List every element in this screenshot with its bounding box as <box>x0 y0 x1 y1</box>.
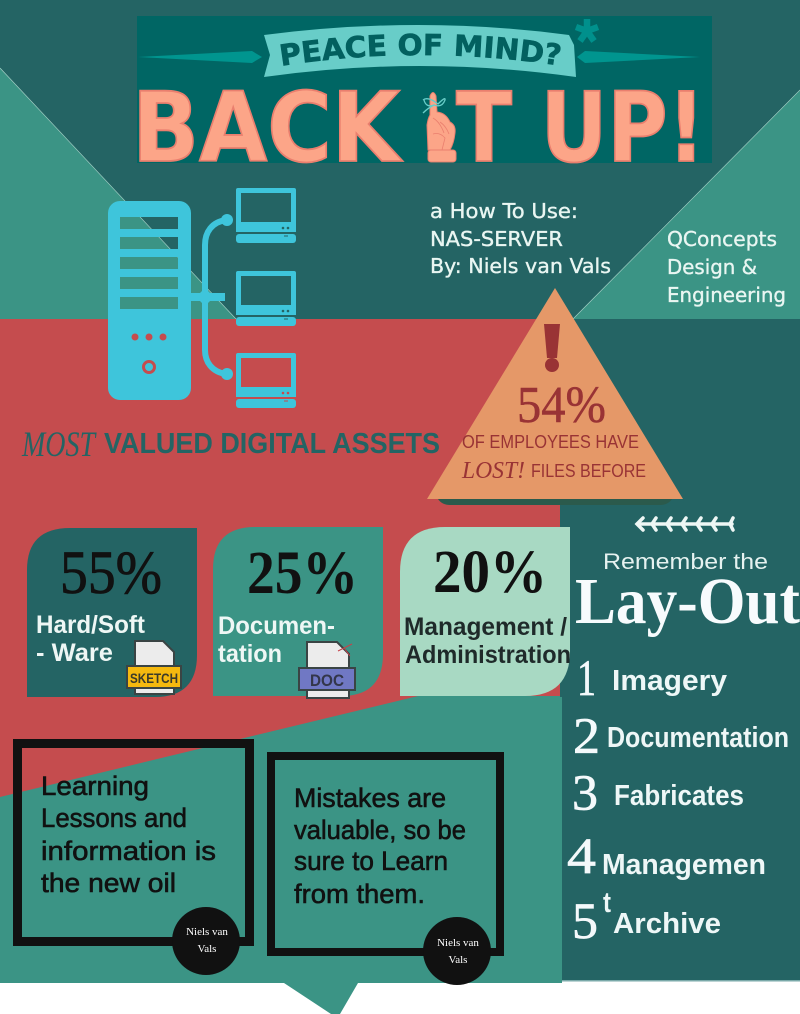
icon: doc file: DOC <box>310 671 344 690</box>
network connectors <box>191 214 233 380</box>
author badge: Niels van <box>186 926 228 938</box>
background: right teal triangle <box>573 90 800 319</box>
stat: 25% <box>247 540 358 607</box>
list item 4: t <box>603 887 611 919</box>
subtitle text block <box>430 199 611 278</box>
icon: left pointer <box>138 51 262 63</box>
company text block: Design & <box>667 255 757 279</box>
list item 2 <box>573 709 789 765</box>
quote text: valuable, so be <box>294 815 466 845</box>
list item 1: 1 <box>577 651 596 707</box>
icon: asterisk <box>576 19 598 41</box>
list item 2: 2 <box>573 709 600 765</box>
quote box 2 <box>271 756 500 985</box>
label: Management / <box>404 613 567 641</box>
quote text: Mistakes are <box>294 783 446 813</box>
monitor middle <box>236 271 296 326</box>
author badge: Vals <box>198 943 216 955</box>
caption line 1: OF EMPLOYEES HAVE <box>462 432 639 452</box>
quote text <box>294 783 466 909</box>
quote text: from them. <box>294 879 425 909</box>
list item 5: Archive <box>613 908 721 940</box>
script word: MOST <box>21 424 97 464</box>
card: management <box>400 527 571 696</box>
company text block <box>667 227 786 307</box>
list item 1 <box>577 651 727 707</box>
list item 3: 3 <box>572 766 598 822</box>
server lights <box>132 334 166 340</box>
card: hardware and software: - Ware <box>36 639 113 667</box>
heading: most valued digital assets <box>21 424 440 464</box>
label: Hard/Soft <box>36 611 146 639</box>
server tower <box>108 201 191 400</box>
main title right: T UP! <box>456 72 705 184</box>
author badge: Vals <box>449 954 467 966</box>
author badge <box>423 917 491 985</box>
list item 3: Fabricates <box>614 780 744 812</box>
monitor bottom <box>236 353 296 408</box>
author badge: Niels van <box>437 937 479 949</box>
background: dark teal top band <box>0 0 800 320</box>
icon: sketch file <box>127 641 181 694</box>
icon: exclamation mark <box>544 324 560 372</box>
server power ring <box>144 362 154 372</box>
list item 4 <box>567 829 766 919</box>
quote text: sure to Learn <box>294 846 448 876</box>
author badge <box>172 907 240 975</box>
card: documentation <box>213 527 383 698</box>
warning triangle callout <box>427 288 683 505</box>
icon: right pointer <box>577 51 700 63</box>
bold words: VALUED DIGITAL ASSETS <box>104 428 440 460</box>
stat: 55% <box>60 540 162 607</box>
background: left teal triangle <box>0 68 236 319</box>
background: red panel <box>0 319 560 809</box>
quote text <box>41 771 216 898</box>
background: lower teal speech panel <box>0 696 562 1014</box>
subtitle text block: By: Niels van Vals <box>430 254 611 278</box>
list item 4: Managemen <box>602 849 766 881</box>
quote text: information is <box>41 836 216 866</box>
subtitle text block: NAS-SERVER <box>430 227 563 251</box>
list item 3 <box>572 766 744 822</box>
quote box 1 <box>18 744 250 975</box>
stat: 20% <box>433 539 547 606</box>
card: management: Administration <box>405 641 571 669</box>
stat: 54% <box>517 377 606 434</box>
monitor top <box>236 188 296 243</box>
card: documentation: tation <box>218 640 282 668</box>
ribbon <box>264 25 576 77</box>
caption lost: LOST! <box>461 458 525 484</box>
subtitle text block: a How To Use: <box>430 199 578 223</box>
icon: server with networked monitors <box>108 188 296 408</box>
caption line 2: FILES BEFORE <box>531 461 646 481</box>
list item 5: 5 <box>572 894 598 950</box>
company text block: Engineering <box>667 283 786 307</box>
panel: right dark column <box>560 319 800 983</box>
quote text: Lessons and <box>41 803 187 833</box>
icon: hand with string <box>423 92 456 162</box>
company text block: QConcepts <box>667 227 777 251</box>
heading: remember the: Remember the <box>603 549 768 574</box>
icon: feathered arrow <box>637 518 733 530</box>
ribbon heading: PEACE OF MIND? <box>280 33 561 66</box>
icon: doc file <box>299 642 355 698</box>
icon: sketch file: SKETCH <box>130 670 178 686</box>
title banner <box>132 16 712 184</box>
quote text: the new oil <box>41 868 176 898</box>
list item 4: 4 <box>567 829 596 885</box>
list item 1: Imagery <box>612 665 727 697</box>
label: Documen- <box>218 612 335 640</box>
list item 5 <box>572 894 721 950</box>
card: hardware and software <box>27 528 197 697</box>
main title left: BACK <box>132 72 403 184</box>
quote text: Learning <box>41 771 149 801</box>
